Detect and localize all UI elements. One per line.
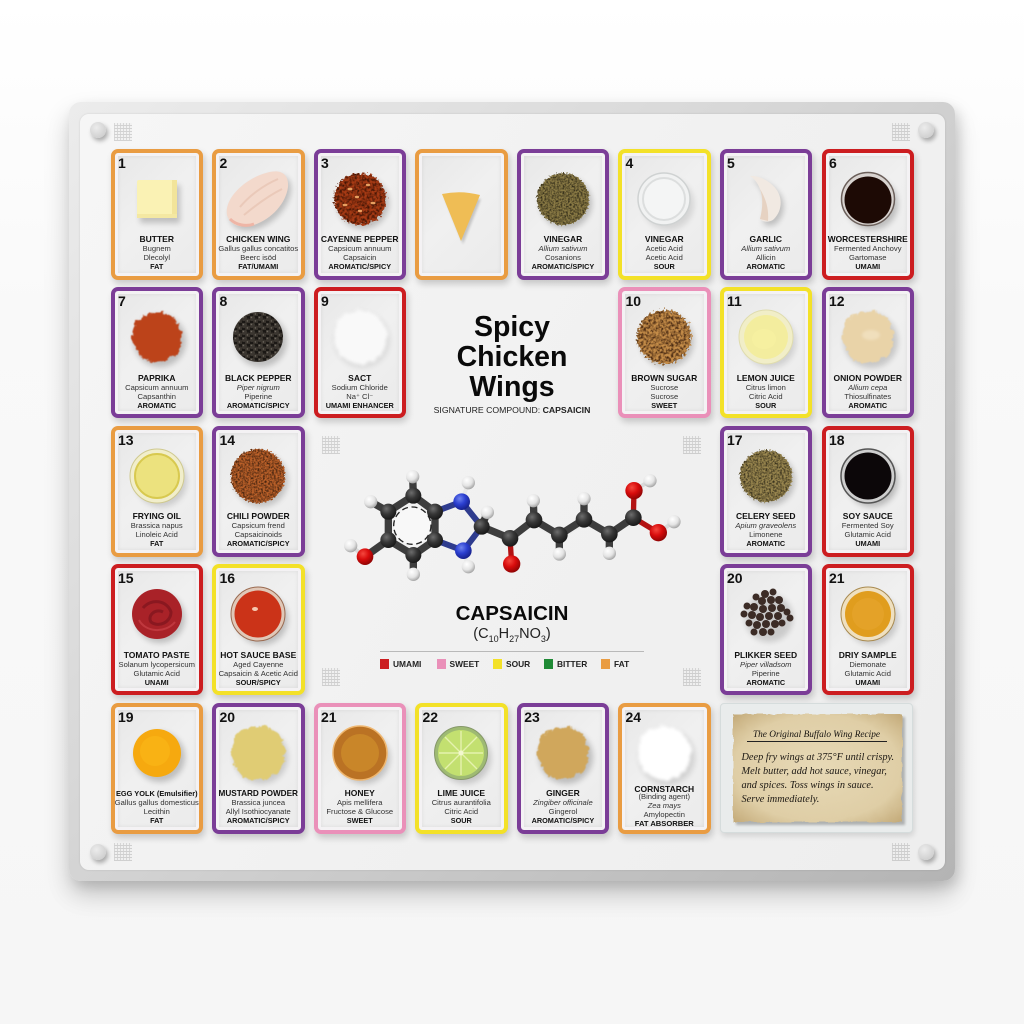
panel: recipe note xyxy=(720,702,913,833)
label: SWEET xyxy=(651,401,677,410)
label: Piperine xyxy=(244,392,272,401)
icon: chicken wing xyxy=(226,171,294,233)
card: salt xyxy=(314,287,406,418)
subtitle: SIGNATURE COMPOUND: CAPSAICIN xyxy=(434,405,590,415)
card: garlic xyxy=(720,148,812,280)
label: Fructose & Glucose xyxy=(326,807,393,816)
label xyxy=(415,789,508,825)
title: Wings xyxy=(469,371,555,403)
label: CORNSTARCH xyxy=(634,784,694,794)
label: Capsicum frend xyxy=(232,521,285,530)
label: Citric Acid xyxy=(444,807,478,816)
number: 19 xyxy=(118,708,134,724)
label: SOUR/SPICY xyxy=(236,678,281,687)
corner bolt: bottom right xyxy=(918,844,934,860)
label: PAPRIKA xyxy=(138,372,176,382)
number: 22 xyxy=(422,708,438,724)
icon: lime slice xyxy=(426,718,496,788)
number: 8 xyxy=(220,293,227,309)
legend swatch: sour xyxy=(493,659,502,669)
label: Acetic Acid xyxy=(646,253,683,262)
label xyxy=(219,650,298,687)
label: BROWN SUGAR xyxy=(631,372,697,382)
icon: black peppercorns xyxy=(232,312,290,370)
number: 16 xyxy=(220,570,235,586)
card: chili powder xyxy=(212,426,304,557)
label: Zea mays xyxy=(648,801,681,810)
icon: cornstarch pile xyxy=(629,718,699,788)
label: BUTTER xyxy=(140,234,174,244)
card: chicken wing xyxy=(212,148,304,280)
icon: butter xyxy=(137,180,182,226)
label: Citrus limon xyxy=(746,383,786,392)
label xyxy=(517,789,609,825)
label: FAT xyxy=(150,539,163,548)
label: SWEET xyxy=(347,816,373,825)
label: Capsaicin & Acetic Acid xyxy=(219,669,298,678)
number: 2 xyxy=(220,154,227,170)
label: VINEGAR xyxy=(544,234,582,244)
card: egg yolk xyxy=(110,702,203,834)
number: 21 xyxy=(321,708,337,724)
label: Brassica juncea xyxy=(231,798,285,807)
label: Cosanions xyxy=(545,253,581,262)
label: Glutamic Acid xyxy=(134,669,180,678)
label: TOMATO PASTE xyxy=(124,650,190,660)
number: 15 xyxy=(118,570,134,586)
card: vinegar liquid xyxy=(618,148,710,280)
label: HOT SAUCE BASE xyxy=(220,650,296,660)
recipe title: The Original Buffalo Wing Recipe xyxy=(753,730,880,740)
title: Chicken xyxy=(457,341,567,373)
number: 20 xyxy=(220,708,235,724)
icon: glass dish xyxy=(637,172,695,231)
legend swatch: fat xyxy=(601,659,610,669)
icon: amber dish xyxy=(833,579,903,649)
label: SOY SAUCE xyxy=(843,511,893,521)
label: Acetic Acid xyxy=(646,244,683,253)
number: 11 xyxy=(727,293,742,309)
label: Capsanthin xyxy=(138,392,176,401)
label: Gartomase xyxy=(849,253,887,262)
number: 13 xyxy=(118,432,134,448)
icon: corn chip xyxy=(442,192,482,244)
label: AROMATIC/SPICY xyxy=(227,401,290,410)
acrylic metal plate xyxy=(69,102,955,881)
label: AROMATIC xyxy=(848,401,887,410)
icon: cayenne flakes xyxy=(332,172,392,232)
legend label: fat: FAT xyxy=(614,658,629,668)
label: FRYING OIL xyxy=(133,511,181,521)
label: Beerc isöd xyxy=(240,253,276,262)
label: LIME JUICE xyxy=(437,788,485,798)
label: GINGER xyxy=(546,788,580,798)
label: AROMATIC/SPICY xyxy=(227,539,290,548)
icon: oil dish xyxy=(130,448,189,509)
QR mark: center upper left xyxy=(322,436,340,454)
label xyxy=(326,372,394,410)
number: 7 xyxy=(118,293,126,309)
recipe body: Melt butter, add hot sauce, vinegar, xyxy=(742,766,887,777)
aged paper xyxy=(732,714,904,824)
label: CHICKEN WING xyxy=(226,234,290,244)
card: celery seed xyxy=(720,426,812,557)
card: cornstarch xyxy=(618,702,710,834)
icon: dark sauce dish xyxy=(840,172,900,232)
icon: garlic clove xyxy=(750,176,786,228)
label: HONEY xyxy=(345,788,375,798)
label: Gingerol xyxy=(549,807,577,816)
label: Zingiber officinale xyxy=(533,798,593,807)
number: 3 xyxy=(321,154,329,170)
label xyxy=(720,651,812,687)
label: AROMATIC/SPICY xyxy=(227,816,290,825)
label: Glutamic Acid xyxy=(845,669,891,678)
label: AROMATIC/SPICY xyxy=(532,816,594,825)
label: Thiosulfinates xyxy=(844,392,891,401)
legend swatch: umami xyxy=(380,659,389,669)
label: Apium graveolens xyxy=(735,521,796,530)
label: SOUR xyxy=(654,262,675,271)
label: Fermented Soy xyxy=(842,521,894,530)
label: FAT xyxy=(150,262,163,271)
chemical formula: (C10H27NO3) xyxy=(473,626,551,644)
label: Allyl Isothiocyanate xyxy=(226,807,291,816)
corner bolt: bottom left xyxy=(90,844,106,860)
card: soy sauce xyxy=(822,426,914,557)
icon: honey dish xyxy=(325,718,395,788)
card: paprika xyxy=(110,287,203,418)
number: 21 xyxy=(829,570,845,586)
number: 10 xyxy=(626,293,641,309)
label: CELERY SEED xyxy=(736,511,796,521)
label: Citrus aurantifolia xyxy=(432,798,491,807)
label: GARLIC xyxy=(749,234,782,244)
card: frying oil xyxy=(110,426,203,557)
label: UMAMI xyxy=(855,262,880,271)
number: 17 xyxy=(727,432,743,448)
icon: soy sauce dish xyxy=(840,448,900,510)
icon: paprika powder xyxy=(130,310,188,370)
label: Piper villadsom xyxy=(740,660,792,669)
QR mark: top right xyxy=(892,123,910,141)
label: Limonene xyxy=(749,530,782,539)
label: LEMON JUICE xyxy=(737,372,795,382)
recipe body xyxy=(742,750,894,807)
QR mark: center lower right xyxy=(683,668,701,686)
icon: ginger powder pile xyxy=(528,718,598,788)
icon: tomato paste dollop xyxy=(132,589,188,646)
recipe body: Deep fry wings at 375°F until crispy. xyxy=(742,752,894,762)
card: butter xyxy=(110,148,203,280)
label: Brassica napus xyxy=(131,521,183,530)
label: Linoleic Acid xyxy=(136,530,178,539)
label: AROMATIC xyxy=(746,678,785,687)
label: Piperine xyxy=(752,669,780,678)
label: SOUR xyxy=(451,816,472,825)
label xyxy=(737,372,795,410)
label: CHILI POWDER xyxy=(227,511,290,521)
card: ginger xyxy=(517,702,609,834)
compound name: CAPSAICIN xyxy=(456,602,568,625)
label: Capsaicinoids xyxy=(235,530,282,539)
title: Spicy xyxy=(474,311,550,343)
recipe body: and spices. Toss wings in sauce. xyxy=(742,780,874,791)
label: BLACK PEPPER xyxy=(225,372,292,382)
QR mark: bottom right xyxy=(892,843,910,861)
label: Aged Cayenne xyxy=(233,660,283,669)
icon: hot sauce dish xyxy=(230,586,290,648)
number: 18 xyxy=(829,432,845,448)
icon: chili powder pile xyxy=(230,448,290,510)
label: Sucrose xyxy=(650,383,678,392)
card: lime juice xyxy=(415,702,508,834)
label: UMAMI xyxy=(855,539,880,548)
number: 20 xyxy=(727,570,743,586)
label: Dlecolyl xyxy=(143,253,170,262)
label: DRIY SAMPLE xyxy=(839,650,897,660)
label xyxy=(842,511,894,548)
legend label: umami: UMAMI xyxy=(393,658,421,668)
legend label: sour: SOUR xyxy=(506,658,530,668)
label xyxy=(225,372,292,410)
label xyxy=(618,784,710,829)
label: AROMATIC/SPICY xyxy=(532,262,594,271)
number: 23 xyxy=(524,708,540,724)
label: AROMATIC xyxy=(137,401,176,410)
label: Capsicum annuum xyxy=(328,244,391,253)
label: FAT ABSORBER xyxy=(635,819,694,828)
label: Bugnem xyxy=(143,244,171,253)
label: SACT xyxy=(348,372,371,382)
label xyxy=(125,372,188,410)
number: 6 xyxy=(829,154,837,170)
label: Apis mellifera xyxy=(337,798,383,807)
label: Citric Acid xyxy=(749,392,783,401)
label: Capsaicin xyxy=(343,253,376,262)
label: FAT/UMAMI xyxy=(238,262,278,271)
label: Amylopectin xyxy=(644,810,685,819)
label: AROMATIC xyxy=(746,539,785,548)
corner bolt: top right xyxy=(918,122,934,138)
number: 1 xyxy=(118,154,126,170)
recipe title xyxy=(746,729,886,742)
card: hot sauce base xyxy=(212,564,304,695)
card: honey xyxy=(314,702,406,834)
icon: onion powder pile xyxy=(840,309,900,370)
card: onion powder xyxy=(822,287,914,418)
molecule: capsaicin ball and stick xyxy=(330,460,700,607)
label: Gallus gallus concatitos xyxy=(218,244,298,253)
label: Sucrose xyxy=(650,392,678,401)
label: Lecithin xyxy=(144,807,170,816)
label: AROMATIC xyxy=(746,262,785,271)
card: dry sample xyxy=(822,564,914,695)
label xyxy=(131,511,183,548)
number: 5 xyxy=(727,154,735,170)
label: Solanum lycopersicum xyxy=(119,660,195,669)
label: WORCESTERSHIRE xyxy=(828,234,908,244)
label xyxy=(218,234,298,271)
icon: herb pile xyxy=(536,172,594,232)
card: unnumbered chip xyxy=(415,148,508,280)
label: EGG YOLK (Emulsifier) xyxy=(116,789,198,798)
label: UMAMI ENHANCER xyxy=(326,401,394,410)
icon: pepper seeds xyxy=(740,588,795,644)
label xyxy=(834,372,902,410)
icon: egg yolk xyxy=(122,718,192,788)
icon: brown sugar pile xyxy=(636,308,696,370)
label xyxy=(631,372,697,410)
label: CAYENNE PEPPER xyxy=(321,234,399,244)
label: Gallus gallus domesticus xyxy=(115,798,199,807)
label: UMAMI xyxy=(855,678,880,687)
aromatic ring xyxy=(394,507,431,544)
label xyxy=(828,234,908,271)
label xyxy=(212,789,304,825)
number: 14 xyxy=(220,432,235,448)
label: Sodium Chloride xyxy=(332,383,388,392)
QR mark: bottom left xyxy=(114,843,132,861)
card: worcestershire xyxy=(822,148,914,280)
label: UNAMI xyxy=(145,678,169,687)
legend swatch: sweet xyxy=(437,659,446,669)
number: 12 xyxy=(829,293,845,309)
label: Piper nigrum xyxy=(237,383,280,392)
icon: mustard powder pile xyxy=(223,718,293,788)
card: mustard powder xyxy=(212,702,304,834)
label xyxy=(118,650,195,687)
recipe body: Serve immediately. xyxy=(742,794,819,805)
label: Capsicum annuum xyxy=(125,383,188,392)
QR mark: center lower left xyxy=(322,668,340,686)
icon: salt pile xyxy=(336,311,390,368)
label: Diemonate xyxy=(849,660,886,669)
label xyxy=(532,234,594,271)
label: Allicin xyxy=(756,253,776,262)
label xyxy=(645,234,684,271)
icon: celery seed pile xyxy=(738,449,798,508)
icon: lemon juice dish xyxy=(738,310,798,370)
label: Glutamic Acid xyxy=(845,530,891,539)
card: vinegar herb xyxy=(517,148,609,280)
legend label: bitter: BITTER xyxy=(557,658,587,668)
label: FAT xyxy=(150,816,163,825)
card: tomato paste xyxy=(110,564,203,695)
label: PLIKKER SEED xyxy=(734,650,797,660)
label: (Binding agent) xyxy=(638,792,690,801)
QR mark: center upper right xyxy=(683,436,701,454)
legend label: sweet: SWEET xyxy=(450,658,479,668)
number: 24 xyxy=(626,708,641,724)
QR mark: top left xyxy=(114,123,132,141)
label: VINEGAR xyxy=(645,234,684,244)
legend swatch: bitter xyxy=(544,659,553,669)
card: pepper seed xyxy=(720,564,812,695)
label: SOUR xyxy=(755,401,776,410)
corner bolt: top left xyxy=(90,122,106,138)
label xyxy=(110,789,203,825)
label xyxy=(741,234,790,271)
label: ONION POWDER xyxy=(834,372,902,382)
card: lemon juice xyxy=(720,287,812,418)
label: Na⁺ Cl⁻ xyxy=(346,392,373,401)
label xyxy=(321,234,399,271)
label xyxy=(735,511,796,548)
label: Fermented Anchovy xyxy=(834,244,902,253)
label xyxy=(314,789,406,825)
label: Allium cepa xyxy=(848,383,887,392)
label xyxy=(227,511,290,548)
label xyxy=(822,651,914,687)
card: brown sugar xyxy=(618,287,710,418)
card: black pepper xyxy=(212,287,304,418)
title xyxy=(412,312,612,402)
number: 4 xyxy=(626,154,633,170)
label: MUSTARD POWDER xyxy=(219,789,298,798)
label: AROMATIC/SPICY xyxy=(328,262,391,271)
card: cayenne pepper xyxy=(314,148,406,280)
label: Allium sativum xyxy=(538,244,587,253)
label xyxy=(140,234,174,271)
label: Allium sativum xyxy=(741,244,790,253)
inner acrylic panel xyxy=(80,114,945,870)
number: 9 xyxy=(321,293,329,309)
